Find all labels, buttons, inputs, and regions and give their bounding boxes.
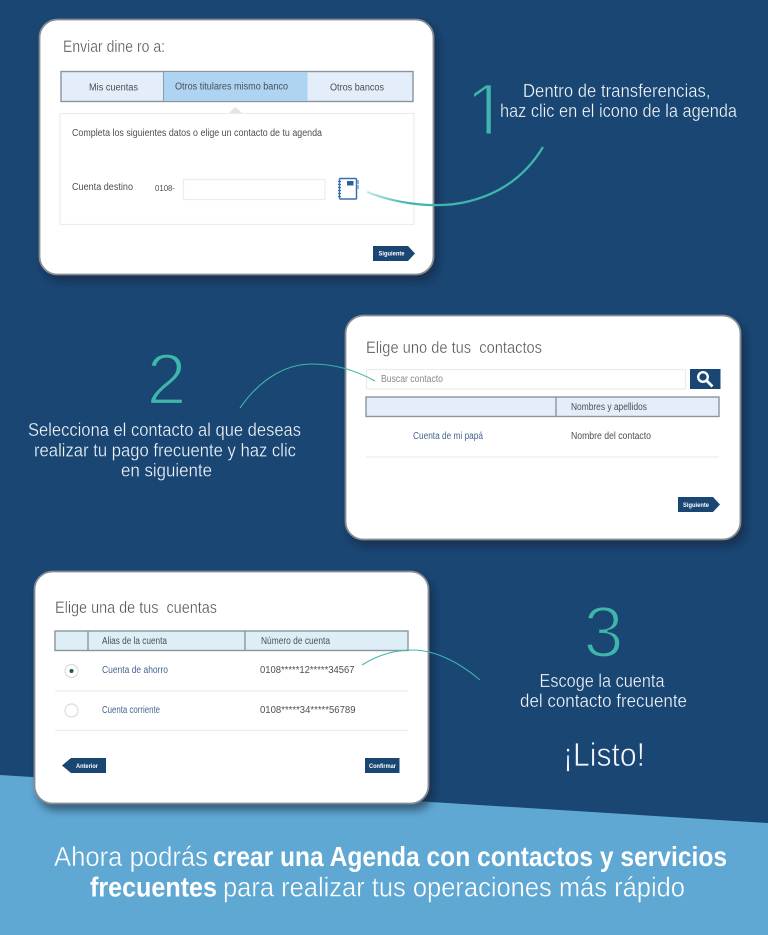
table header: Número de cuenta — [261, 636, 330, 647]
step 1 text: Dentro de transferencias, — [523, 81, 710, 101]
tabs: Mis cuentas — [89, 82, 138, 94]
row: cuenta corriente: Cuenta corriente — [102, 705, 160, 716]
panel: step 1 transfer form — [40, 20, 434, 274]
tabs: Otros titulares mismo banco — [175, 82, 288, 92]
button: siguiente: Siguiente — [683, 502, 709, 509]
button: siguiente: Siguiente — [378, 250, 405, 258]
arrow: step 3 curve — [362, 650, 480, 680]
step 3 text: Escoge la cuenta — [540, 671, 665, 691]
bottom light blue band — [0, 775, 768, 935]
step 1 text: haz clic en el icono de la agenda — [500, 101, 738, 121]
contact row — [413, 431, 651, 442]
card 3 background — [34, 572, 428, 804]
button: siguiente — [678, 497, 720, 512]
heading: elige contacto: Elige uno de tus contactos — [366, 338, 542, 357]
table header: Alias de la cuenta — [102, 636, 167, 647]
row: cuenta corriente: 0108*****34*****56789 — [260, 705, 356, 716]
account input — [184, 180, 325, 200]
step 3 number: 3 — [584, 593, 624, 673]
step 3 text — [520, 671, 687, 711]
row: cuenta de ahorro — [65, 664, 355, 678]
closing message: frecuentes — [90, 872, 217, 902]
listo text: ¡Listo! — [563, 736, 645, 773]
field label: Cuenta destino — [72, 182, 133, 193]
closing message — [54, 841, 727, 902]
button: anterior: Anterior — [76, 763, 98, 770]
row: cuenta de ahorro: Cuenta de ahorro — [102, 665, 168, 676]
form panel — [60, 114, 414, 224]
tabs — [61, 72, 413, 102]
row: cuenta corriente — [65, 704, 356, 717]
button: anterior — [62, 758, 106, 773]
contact row: Nombre del contacto — [571, 431, 651, 442]
table header — [55, 631, 408, 650]
closing message: para realizar tus operaciones más rápido — [223, 872, 685, 902]
step 1 number: 1 — [465, 67, 510, 156]
step 1 text — [500, 81, 738, 121]
row: cuenta de ahorro: 0108*****12*****34567 — [260, 665, 355, 676]
account prefix: 0108- — [155, 183, 175, 193]
closing message: Ahora podrás — [54, 841, 208, 872]
step 3 text: del contacto frecuente — [520, 691, 687, 711]
tabs: Otros bancos — [330, 82, 384, 94]
button: confirmar: Confirmar — [369, 763, 396, 770]
icon: search button — [690, 369, 720, 389]
card 1 background — [40, 20, 434, 274]
arrow: step 1 curve — [367, 147, 543, 205]
button: confirmar — [365, 758, 400, 773]
heading: elige cuenta: Elige una de tus cuentas — [55, 598, 217, 617]
search input: Buscar contacto — [381, 374, 443, 385]
table header — [366, 397, 719, 416]
button: siguiente — [373, 246, 415, 261]
panel: step 3 accounts — [34, 572, 428, 804]
step 2 text: en siguiente — [121, 460, 212, 480]
search input — [366, 370, 686, 389]
tab pointer — [229, 107, 242, 113]
table header: Nombres y apellidos — [571, 402, 647, 413]
step 2 text: realizar tu pago frecuente y haz clic — [34, 440, 296, 460]
step 2 number: 2 — [146, 340, 187, 420]
panel: step 2 contacts — [346, 316, 740, 540]
step 2 text: Selecciona el contacto al que deseas — [28, 420, 301, 440]
card 2 background — [346, 316, 740, 540]
step 2 text — [28, 420, 301, 480]
contact row: Cuenta de mi papá — [413, 431, 483, 442]
heading: enviar dinero: Enviar dine ro a: — [63, 37, 165, 56]
icon: agenda — [338, 178, 359, 199]
form instructions: Completa los siguientes datos o elige un contacto de tu agenda — [72, 128, 322, 139]
arrow: step 2 curve — [240, 364, 375, 408]
